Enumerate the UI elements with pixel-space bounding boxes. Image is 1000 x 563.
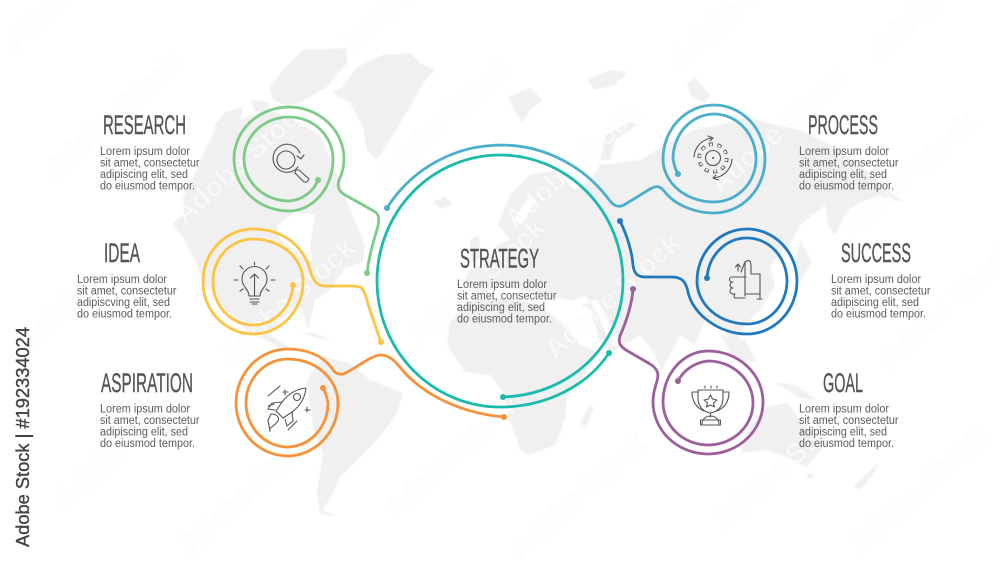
watermark: stock text pattern: Adobe Stock	[168, 92, 317, 229]
text: research body: Lorem ipsum dolor	[100, 146, 190, 158]
world map background	[172, 48, 905, 517]
text: research body: adipiscing elit, sed	[100, 169, 188, 181]
watermark: stock text pattern: Adobe Stock	[703, 62, 852, 199]
text: success body: sit amet, consectetur	[831, 286, 931, 298]
text: process body: adipiscing elit, sed	[799, 169, 887, 181]
text: aspiration body: do eiusmod tempor.	[100, 438, 195, 450]
watermark: stock text pattern: Adobe Stock	[403, 212, 552, 349]
watermark: stock text pattern: Adobe Stock	[833, 107, 982, 244]
watermark: stock text pattern: Adobe Stock	[213, 232, 362, 369]
title: idea: IDEA	[104, 238, 140, 268]
watermark: stock text pattern: Adobe Stock	[378, 387, 527, 524]
text: success body: adipiscing elit, sed	[831, 297, 919, 309]
text: goal body: sit amet, consectetur	[799, 415, 899, 427]
text: idea body: Lorem ipsum dolor	[77, 274, 167, 286]
watermark: stock text pattern: Adobe Stock	[38, 47, 187, 184]
text: process body	[799, 146, 899, 192]
text: strategy body: sit amet, consectetur	[457, 290, 557, 302]
text: research body	[100, 146, 200, 192]
text: strategy body: do eiusmod tempor.	[457, 314, 552, 326]
watermark: stock text pattern: Adobe Stock	[538, 227, 687, 364]
icon: magnifier	[273, 144, 309, 182]
text: goal body	[799, 404, 899, 450]
text: success body	[831, 274, 931, 320]
icon: thumbs up	[730, 261, 762, 299]
title: research: RESEARCH	[103, 110, 186, 140]
icon: rocket	[268, 386, 310, 431]
icon: trophy	[692, 386, 729, 425]
text: aspiration body: adipiscing elit, sed	[100, 426, 188, 438]
text: process body: Lorem ipsum dolor	[799, 146, 889, 158]
connector and ring: aspiration, orange	[236, 349, 507, 456]
text: success body: Lorem ipsum dolor	[831, 274, 921, 286]
connector and ring: success, blue	[617, 218, 797, 334]
connector and ring: process, cyan	[384, 105, 765, 213]
text: strategy body: Lorem ipsum dolor	[457, 279, 547, 291]
connector and ring: research, green	[234, 107, 379, 276]
text: strategy body	[457, 279, 557, 326]
text: process body: do eiusmod tempor.	[799, 180, 894, 192]
icon: light bulb	[234, 262, 275, 304]
text: research body: sit amet, consectetur	[100, 158, 200, 170]
text: success body: do eiusmod tempor.	[831, 308, 926, 320]
connector and ring: goal, purple	[619, 286, 763, 454]
connector and ring: idea, yellow	[203, 229, 384, 345]
watermark: stock text pattern: Adobe Stock	[498, 97, 647, 234]
text: strategy body: adipiscing elit, sed	[457, 302, 545, 314]
map water cut-outs	[277, 195, 622, 345]
text: idea body	[77, 274, 177, 320]
text: goal body: Lorem ipsum dolor	[799, 404, 889, 416]
text: research body: do eiusmod tempor.	[100, 180, 195, 192]
icon: gear	[694, 136, 732, 180]
watermark: stock text pattern: Adobe Stock	[173, 422, 322, 559]
title: strategy: STRATEGY	[460, 244, 539, 274]
text: process body: sit amet, consectetur	[799, 158, 899, 170]
title: success: SUCCESS	[841, 238, 911, 268]
watermark: stock text pattern: Adobe Stock	[503, 427, 652, 563]
watermark: stock text pattern: Adobe Stock	[843, 422, 992, 559]
watermark: stock text pattern: Adobe	[13, 273, 99, 354]
title: process: PROCESS	[808, 110, 878, 140]
text: goal body: do eiusmod tempor.	[799, 438, 894, 450]
watermark: stock text pattern: Adobe Stock	[708, 397, 857, 534]
text: idea body: sit amet, consectetur	[77, 286, 177, 298]
watermark: stock text pattern: Adobe Stock	[48, 377, 197, 514]
text: idea body: adipiscving elit, sed	[77, 297, 170, 309]
watermark: stock text pattern: Adobe Stock	[368, 52, 517, 189]
title: goal: GOAL	[823, 368, 863, 398]
vertical stock id label: Adobe Stock | #192334024	[13, 327, 33, 547]
text: goal body: adipiscing elit, sed	[799, 426, 887, 438]
text: idea body: do eiusmod tempor.	[77, 308, 172, 320]
text: aspiration body	[100, 404, 200, 450]
title: aspiration: ASPIRATION	[101, 368, 193, 398]
central ring: teal spiral	[377, 155, 623, 407]
text: aspiration body: Lorem ipsum dolor	[100, 404, 190, 416]
text: aspiration body: sit amet, consectetur	[100, 415, 200, 427]
